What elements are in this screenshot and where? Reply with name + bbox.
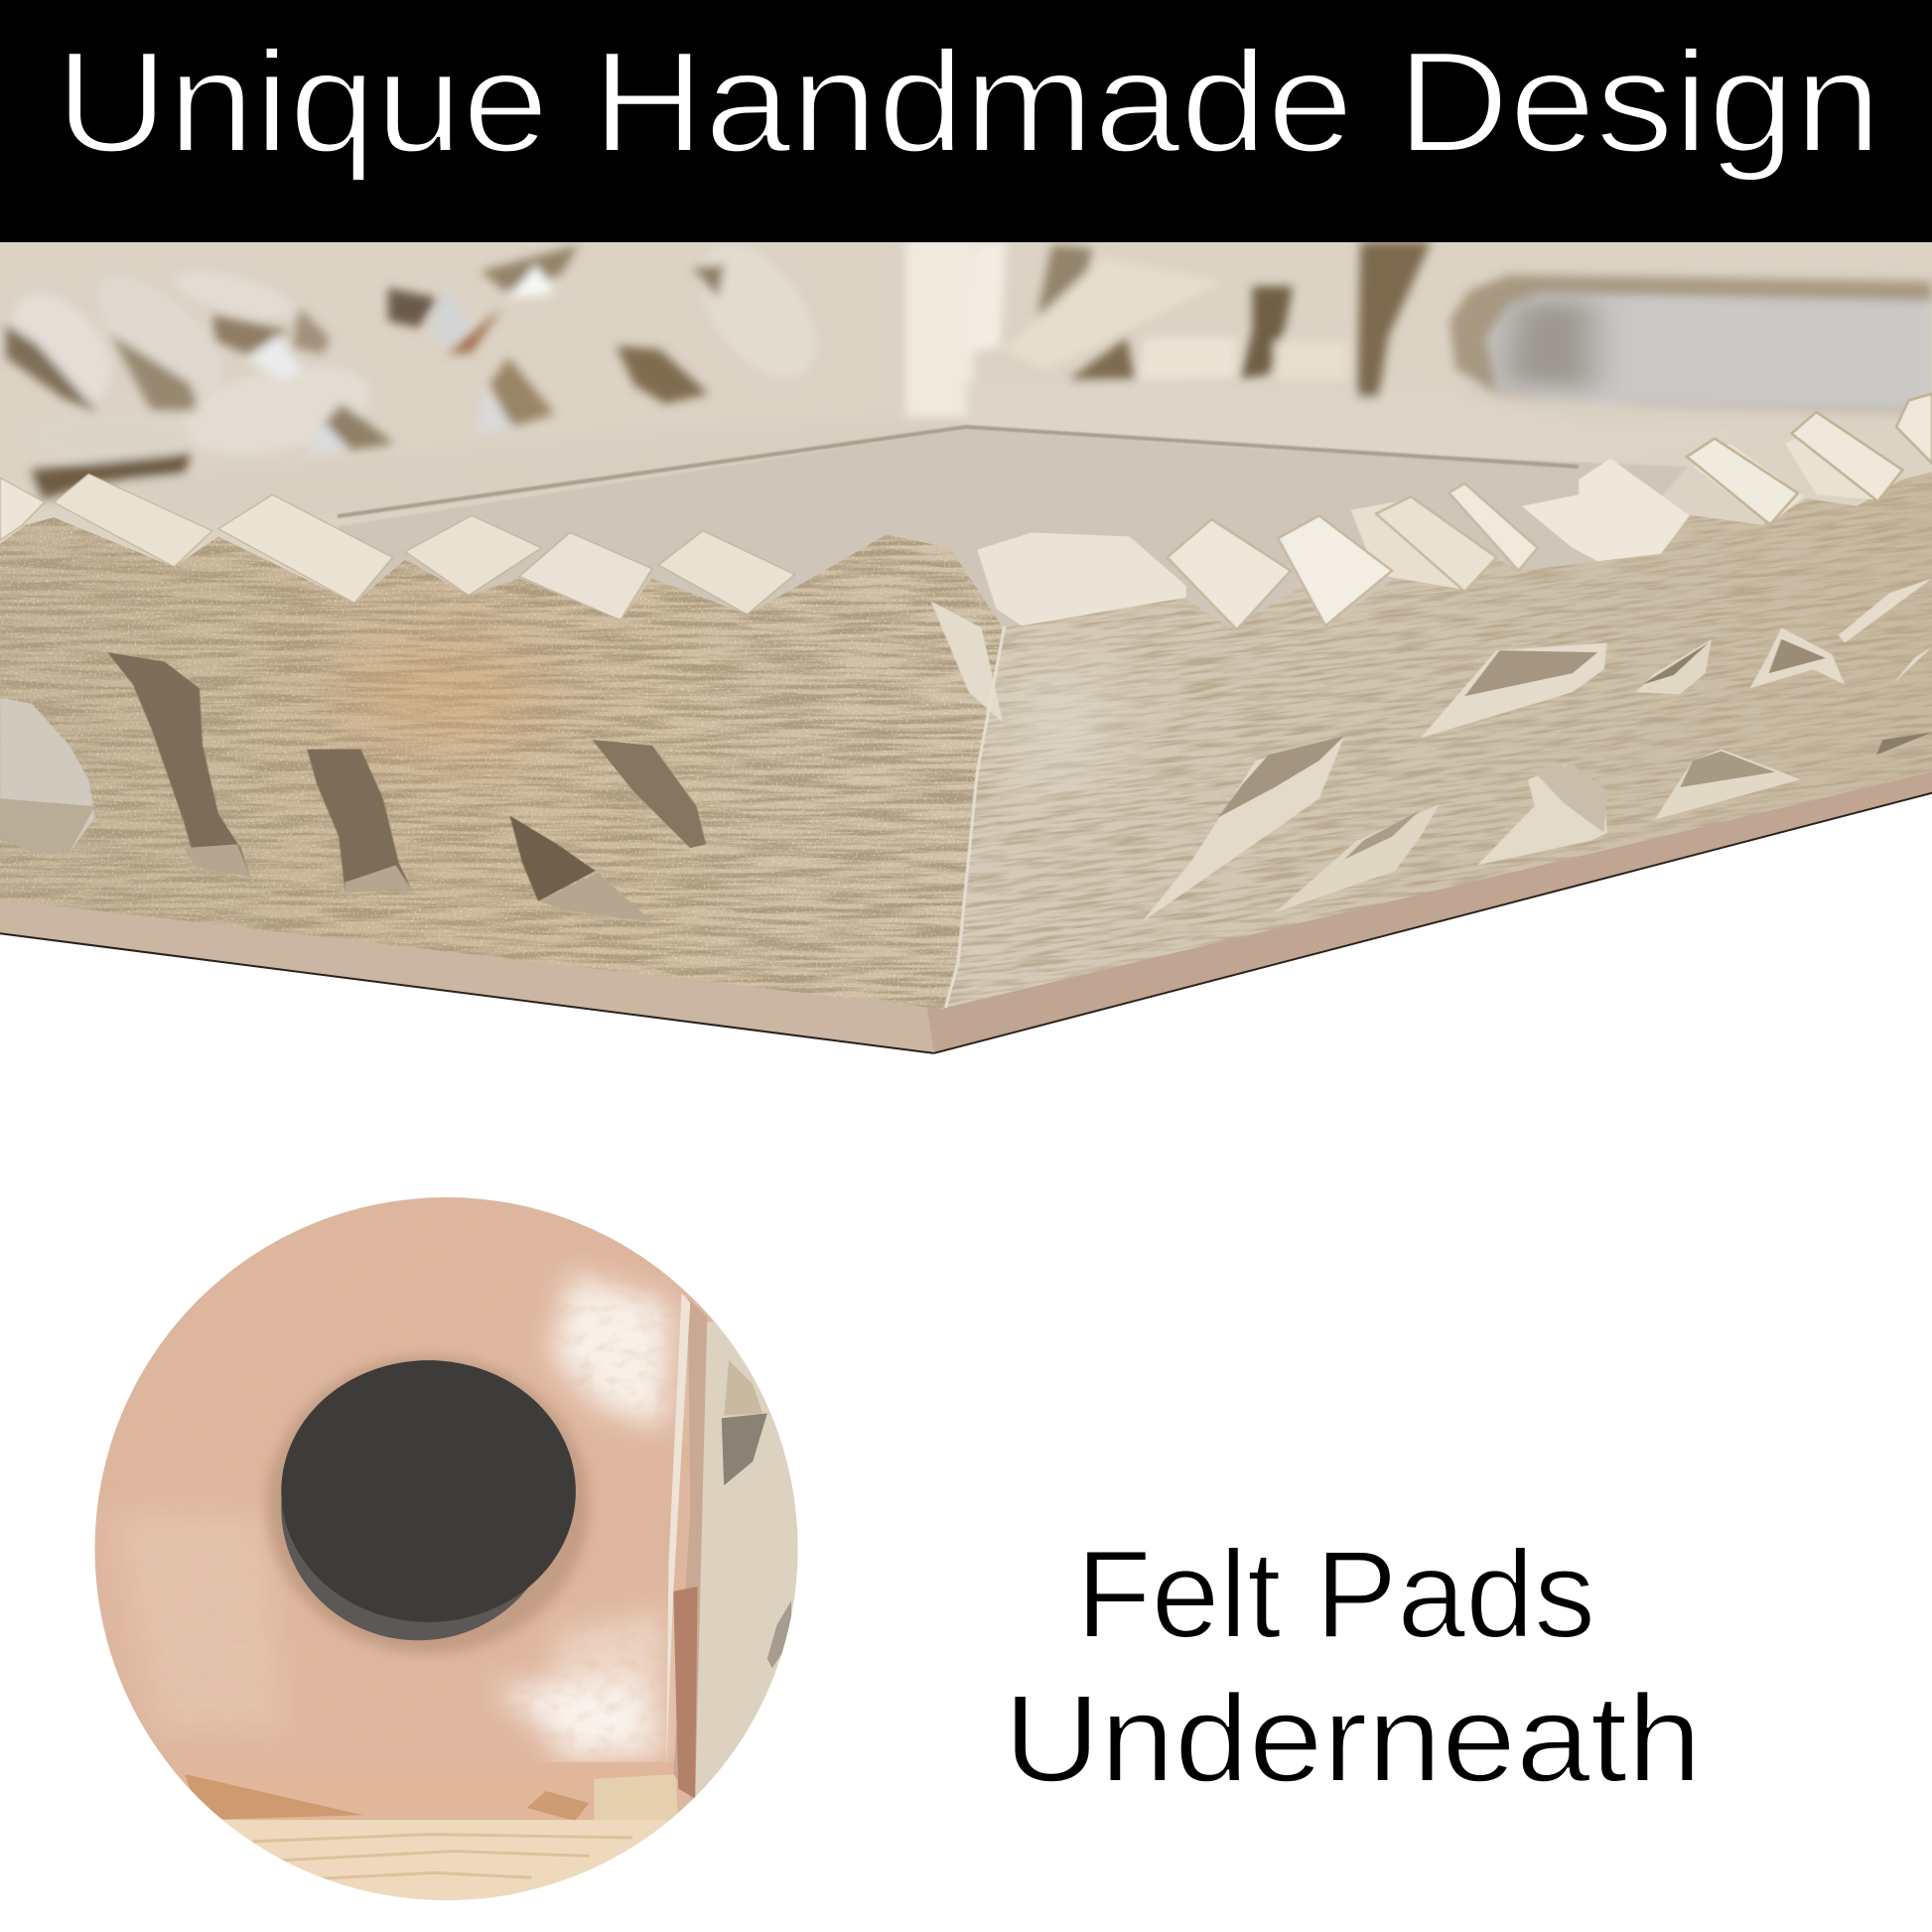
title: Unique Handmade Design bbox=[56, 22, 1881, 183]
left face of tray bbox=[0, 447, 1023, 1062]
photo: carved wooden tray corner bbox=[0, 242, 1932, 1054]
handle opening bbox=[0, 698, 95, 852]
header banner bbox=[0, 0, 1932, 242]
caption: felt pads underneath: Underneath bbox=[1004, 1670, 1702, 1808]
tray handle cut-out bbox=[1449, 275, 1932, 424]
zigzag rim teeth (right) bbox=[977, 459, 1690, 629]
lower wood edge bbox=[117, 1762, 744, 1926]
tray background carving (out of focus) bbox=[0, 242, 1932, 627]
caption: felt pads underneath: Felt Pads bbox=[1076, 1526, 1595, 1664]
carved holes on left face bbox=[107, 652, 706, 922]
tray base board bbox=[0, 768, 1932, 1053]
worn corner highlight bbox=[931, 601, 1003, 723]
right-face details bbox=[945, 459, 1932, 1008]
corner edge bbox=[945, 625, 1005, 1008]
right wood side bbox=[666, 1293, 806, 1808]
zigzag rim teeth (far right) bbox=[1687, 394, 1932, 524]
caption: felt pads underneath bbox=[1004, 1526, 1702, 1808]
carved cuts on right face bbox=[1142, 578, 1932, 922]
zigzag rim teeth (left) bbox=[0, 474, 794, 621]
left-face details bbox=[0, 474, 1003, 922]
right face of tray bbox=[799, 272, 1932, 1205]
tray floor bbox=[337, 425, 1686, 627]
circular inset: felt pad bbox=[89, 1191, 806, 1926]
worn white patches bbox=[113, 1274, 671, 1764]
felt pad bbox=[267, 1355, 589, 1654]
